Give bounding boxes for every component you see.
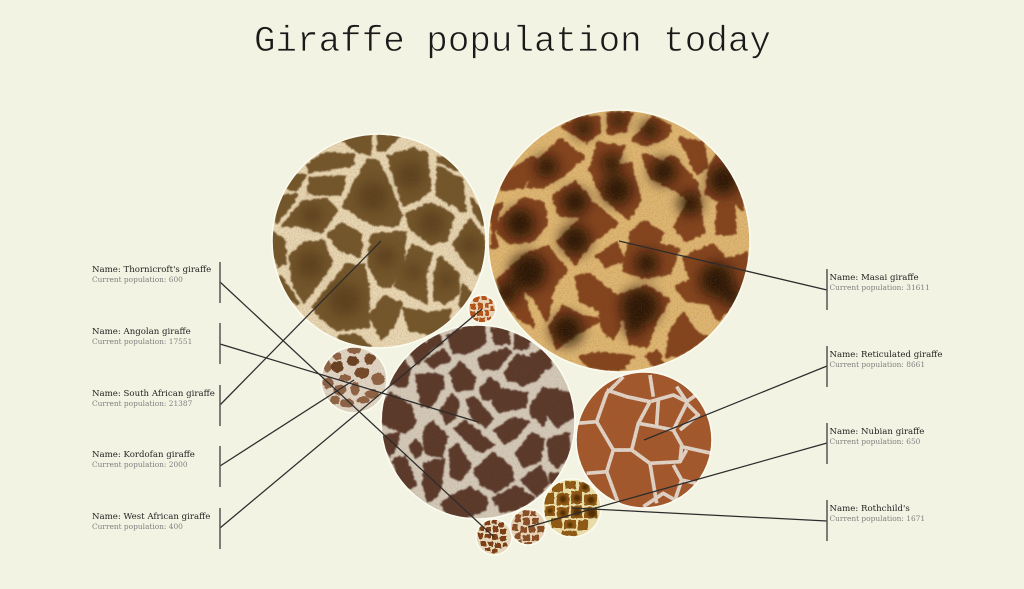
label: South African giraffe	[92, 385, 220, 426]
label: South African giraffe: Current population: 21387	[92, 399, 193, 408]
label: Reticulated giraffe	[827, 346, 942, 387]
bubble: Rothschild's giraffe	[541, 477, 603, 539]
label: Thornicroft's giraffe	[92, 262, 220, 303]
label: Kordofan giraffe	[92, 446, 220, 487]
label: Nubian giraffe: Current population: 650	[830, 437, 921, 446]
label: Reticulated giraffe: Name: Reticulated giraffe	[830, 350, 942, 360]
label: Masai giraffe: Current population: 31611	[830, 283, 930, 292]
label: Reticulated giraffe: Current population: 8661	[830, 360, 925, 369]
bubble: West African giraffe	[467, 294, 497, 324]
label: Kordofan giraffe: Current population: 2000	[92, 460, 188, 469]
bubble: Angolan giraffe	[378, 322, 578, 522]
label: Angolan giraffe	[92, 323, 220, 364]
label: Masai giraffe	[827, 269, 930, 310]
label: Nubian giraffe	[827, 423, 924, 464]
connector lines	[220, 241, 827, 537]
label: Rothschild's giraffe: Current population: 1671	[830, 514, 925, 523]
label: Angolan giraffe: Current population: 17551	[92, 337, 192, 346]
label: Angolan giraffe: Name: Angolan giraffe	[92, 327, 191, 337]
label: West African giraffe: Name: West African giraffe	[92, 512, 210, 522]
label: Rothschild's giraffe: Name: Rothchild's	[830, 504, 910, 514]
bubble: South African giraffe	[270, 130, 490, 350]
label: Thornicroft's giraffe: Name: Thornicroft's giraffe	[92, 265, 211, 275]
bubble: Kordofan giraffe	[319, 345, 389, 415]
label: Rothschild's giraffe	[827, 500, 925, 541]
bubble: Thornicroft's giraffe	[476, 518, 512, 556]
bubble: Reticulated giraffe	[574, 370, 714, 510]
label: Masai giraffe: Name: Masai giraffe	[830, 273, 919, 283]
label: Nubian giraffe: Name: Nubian giraffe	[830, 427, 924, 437]
label: Thornicroft's giraffe: Current population: 600	[92, 275, 183, 284]
bubble: Nubian giraffe	[510, 508, 546, 546]
title: Giraffe population today	[254, 21, 771, 62]
bubble: Masai giraffe	[485, 105, 755, 375]
label: West African giraffe	[92, 508, 220, 549]
label: South African giraffe: Name: South African giraffe	[92, 389, 215, 399]
label: West African giraffe: Current population: 400	[92, 522, 183, 531]
label: Kordofan giraffe: Name: Kordofan giraffe	[92, 450, 195, 460]
